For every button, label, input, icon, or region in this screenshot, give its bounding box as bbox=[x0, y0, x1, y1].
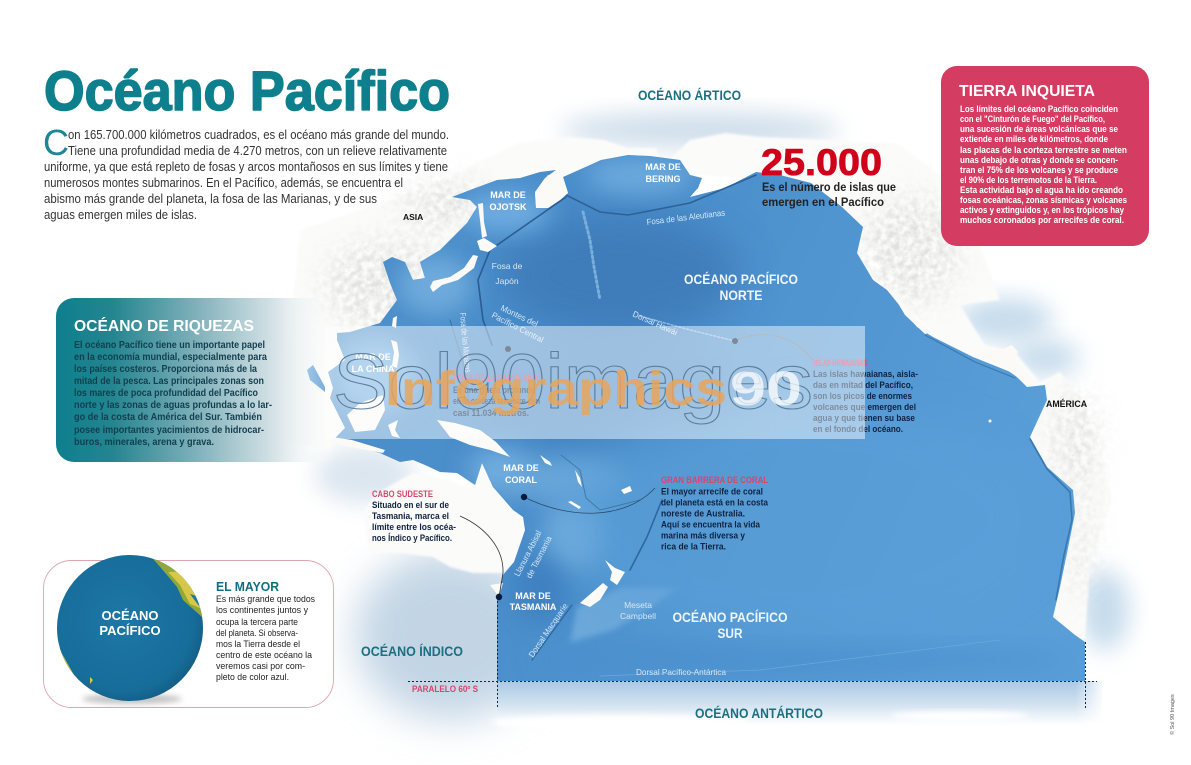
caption: Es el número de islas que bbox=[762, 180, 896, 194]
label: Fosa de Japón: Japón bbox=[495, 276, 519, 286]
text block: Las islas hawaianas, aisla- bbox=[813, 369, 918, 379]
map: Pacific Ocean bbox=[280, 88, 1129, 729]
leader line and marker bbox=[732, 335, 813, 360]
label: América: AMÉRICA bbox=[1046, 399, 1088, 409]
label: Océano Ártico: OCÉANO ÁRTICO bbox=[638, 88, 741, 103]
caption: emergen en el Pacífico bbox=[762, 195, 884, 209]
text block: en la economía mundial, especialmente para bbox=[74, 352, 267, 363]
text block: límite entre los océa- bbox=[372, 522, 456, 532]
text block: del planeta está en la costa bbox=[661, 498, 769, 508]
label: Mar de la China: MAR DE bbox=[355, 352, 391, 362]
text block: el 90% de los terremotos de la Tierra. bbox=[960, 174, 1097, 185]
heading: FOSA DE LAS MARIANAS bbox=[453, 373, 543, 383]
text block: centro de este océano la bbox=[216, 650, 313, 660]
panel: Tierra inquieta bbox=[941, 66, 1149, 246]
globe label: OCÉANO bbox=[101, 608, 159, 623]
text block: Los límites del océano Pacífico coinciden bbox=[960, 103, 1118, 114]
heading: EL MAYOR bbox=[216, 579, 280, 594]
heading: GRAN BARRERA DE CORAL bbox=[661, 475, 769, 485]
label: Océano Índico: OCÉANO ÍNDICO bbox=[361, 644, 463, 659]
label: Llanura Abisal de Tasmania: de Tasmania bbox=[524, 534, 554, 580]
text block: extiende en miles de kilómetros, donde bbox=[960, 133, 1108, 144]
watermark: Infographics: Infographics bbox=[385, 363, 727, 416]
icon: globe bbox=[57, 555, 203, 701]
text block: Es una grieta profunda bbox=[453, 385, 536, 395]
paragraph: uniforme, ya que está repleto de fosas y arcos montañosos en sus límites y tiene bbox=[44, 160, 448, 174]
text block: mos la Tierra desde el bbox=[216, 639, 300, 649]
label: Fosa de Japón: Fosa de bbox=[492, 261, 522, 271]
label: Océano Pacífico Norte: OCÉANO PACÍFICO bbox=[684, 272, 798, 287]
label: Meseta Campbell: Campbell bbox=[620, 611, 656, 621]
marker bbox=[505, 346, 511, 352]
text block: veremos casi por com- bbox=[216, 661, 305, 671]
text block bbox=[453, 385, 540, 418]
label: Océano Antártico: OCÉANO ANTÁRTICO bbox=[695, 706, 823, 721]
text block: norte y las zonas de aguas profundas a lo lar- bbox=[74, 400, 272, 411]
heading: OCÉANO DE RIQUEZAS bbox=[74, 316, 254, 335]
label: Fosa de las Aleutianas: Fosa de las Aleutianas bbox=[646, 207, 726, 227]
text block: del planeta. Si observa- bbox=[216, 628, 298, 638]
label: Mar de Ojotsk: OJOTSK bbox=[489, 202, 527, 212]
callout: Gran Barrera de Coral bbox=[521, 475, 769, 552]
watermark bbox=[325, 326, 865, 439]
text block bbox=[372, 500, 456, 543]
paragraph bbox=[44, 128, 449, 222]
text block: rica de la Tierra. bbox=[661, 542, 726, 552]
text block: volcanes que emergen del bbox=[813, 402, 916, 412]
caption bbox=[762, 180, 896, 209]
number: 25.000 bbox=[761, 142, 882, 183]
panel: Océano de riquezas bbox=[56, 298, 335, 462]
text block: fosas oceánicas, zonas sísmicas y volcanes bbox=[960, 194, 1127, 205]
label: Mar de Ojotsk: MAR DE bbox=[490, 190, 526, 200]
label: Paralelo 60º S: PARALELO 60º S bbox=[412, 684, 478, 694]
label: Fosa de las Marianas: Fosa de las Marianas bbox=[458, 312, 473, 373]
text block: agua y que tienen su base bbox=[813, 413, 915, 423]
heading: TIERRA INQUIETA bbox=[959, 83, 1095, 100]
label: Mar de Coral: MAR DE bbox=[503, 463, 539, 473]
label: Mar de Coral: CORAL bbox=[505, 475, 537, 485]
leader line and marker bbox=[521, 488, 655, 513]
credit: © Sol 90 Images bbox=[1169, 694, 1176, 735]
text block: una sucesión de áreas volcánicas que se bbox=[960, 123, 1118, 134]
label: Océano Pacífico Norte bbox=[684, 272, 798, 303]
label: Océano Pacífico Sur bbox=[672, 610, 788, 641]
text block: las placas de la corteza terrestre se meten bbox=[960, 144, 1127, 155]
text block: en la corteza terrestre con bbox=[453, 396, 540, 406]
heading: ISLAS HAWAIANAS bbox=[814, 358, 867, 368]
text block: mitad de la pesca. Las principales zonas son bbox=[74, 376, 264, 387]
text block: los continentes juntos y bbox=[216, 605, 308, 615]
intro text bbox=[43, 122, 449, 222]
label: Mar de Bering: BERING bbox=[645, 174, 681, 184]
label: Mar de la China: LA CHINA bbox=[352, 364, 395, 374]
drop cap: C bbox=[43, 122, 69, 163]
label: Océano Pacífico Sur: SUR bbox=[718, 626, 743, 641]
text block: ocupa la tercera parte bbox=[216, 617, 298, 627]
parallel 60 S dotted lines bbox=[408, 597, 1097, 709]
label: Dorsal Hawái: Dorsal Hawái bbox=[631, 309, 679, 337]
map labels bbox=[352, 88, 1088, 721]
label: Montes del Pacífico Central: Pacífico Central bbox=[490, 310, 546, 345]
watermark: 90: 90 bbox=[730, 363, 802, 416]
label: Mar de Tasmania: MAR DE bbox=[515, 591, 551, 601]
pale surrounding seas bbox=[315, 112, 1129, 729]
text block bbox=[960, 103, 1127, 225]
text block: activos y extinguidos y, en los trópicos hay bbox=[960, 204, 1125, 215]
text block: los mares de poca profundidad del Pacífico bbox=[74, 388, 258, 399]
panel: El mayor bbox=[44, 550, 334, 708]
text block: nos Índico y Pacífico. bbox=[372, 532, 452, 543]
globe shadow bbox=[82, 694, 182, 704]
islands bbox=[332, 175, 1040, 607]
ocean: Andaman sea bbox=[307, 365, 325, 392]
ocean body bbox=[300, 150, 1100, 690]
trenches and ridges bbox=[450, 175, 1072, 676]
callout: Islas Hawaianas bbox=[732, 335, 918, 434]
label: Montes del Pacífico Central: Montes del bbox=[499, 303, 540, 329]
text block bbox=[216, 594, 315, 682]
watermark: Sol90images: Sol90images bbox=[333, 337, 813, 425]
heading: CABO SUDESTE bbox=[372, 489, 433, 499]
label: Asia: ASIA bbox=[403, 212, 423, 222]
text block: El océano Pacífico tiene un importante papel bbox=[74, 340, 265, 351]
label: Dorsal Pacífico-Antártica: Dorsal Pacífico-Antártica bbox=[636, 667, 726, 677]
label: Dorsal Macquarie: Dorsal Macquarie bbox=[526, 601, 570, 659]
text block: posee importantes yacimientos de hidrocar- bbox=[74, 425, 264, 436]
text block: Esta actividad bajo el agua ha ido creando bbox=[960, 184, 1123, 195]
label: Llanura Abisal de Tasmania: Llanura Abisal bbox=[512, 529, 544, 578]
callout: Fosa de las Marianas bbox=[453, 346, 543, 418]
label: Mar de Tasmania: TASMANIA bbox=[510, 602, 557, 612]
label: Océano Pacífico Norte: NORTE bbox=[720, 288, 762, 303]
land masses bbox=[280, 133, 1112, 640]
text block: marina más diversa y bbox=[661, 530, 746, 540]
text block bbox=[661, 486, 769, 552]
text block: los países costeros. Proporciona más de la bbox=[74, 364, 257, 375]
text block: Tasmania, marca el bbox=[372, 511, 449, 521]
text block: Es más grande que todos bbox=[216, 594, 315, 604]
leader line and marker bbox=[460, 516, 503, 600]
paragraph: numerosos montes submarinos. En el Pacífico, además, se encuentra el bbox=[44, 176, 403, 190]
label: Mar de Bering: MAR DE bbox=[645, 162, 681, 172]
text block: go de la costa de América del Sur. También bbox=[74, 412, 262, 423]
text block: Situado en el sur de bbox=[372, 500, 449, 510]
text block: unas debajo de otras y donde se concen- bbox=[960, 154, 1118, 165]
text block: casi 11.034 metros. bbox=[453, 408, 529, 418]
globe label: PACÍFICO bbox=[99, 623, 161, 638]
stat: 25.000 islands bbox=[761, 142, 896, 209]
text block: pleto de color azul. bbox=[216, 672, 289, 682]
label: Océano Pacífico Sur: OCÉANO PACÍFICO bbox=[672, 610, 788, 625]
paragraph: Tiene una profundidad media de 4.270 metros, con un relieve relativamente bbox=[68, 144, 447, 158]
text block: muchos coronados por arrecifes de coral. bbox=[960, 214, 1124, 225]
text block: son los picos de enormes bbox=[813, 391, 912, 401]
text block: El mayor arrecife de coral bbox=[661, 486, 763, 496]
text block: Aquí se encuentra la vida bbox=[661, 520, 761, 530]
text block: noreste de Australia. bbox=[661, 508, 745, 518]
text block: en el fondo del océano. bbox=[813, 424, 903, 434]
text block: con el "Cinturón de Fuego" del Pacífico, bbox=[960, 113, 1105, 124]
text block: tran el 75% de los volcanes y se produce bbox=[960, 164, 1118, 175]
text block bbox=[813, 369, 918, 434]
paragraph: on 165.700.000 kilómetros cuadrados, es el océano más grande del mundo. bbox=[68, 128, 449, 142]
paragraph: abismo más grande del planeta, la fosa de las Marianas, y de sus bbox=[44, 192, 377, 206]
callout: Cabo Sudeste bbox=[372, 489, 503, 600]
text block bbox=[74, 340, 272, 448]
land relief texture bbox=[323, 180, 1097, 610]
text block: das en mitad del Pacífico, bbox=[813, 380, 913, 390]
title: Océano Pacífico bbox=[44, 59, 450, 122]
label: Meseta Campbell: Meseta bbox=[624, 600, 652, 610]
text block: buros, minerales, arena y grava. bbox=[74, 437, 214, 448]
paragraph: aguas emergen miles de islas. bbox=[44, 208, 197, 222]
